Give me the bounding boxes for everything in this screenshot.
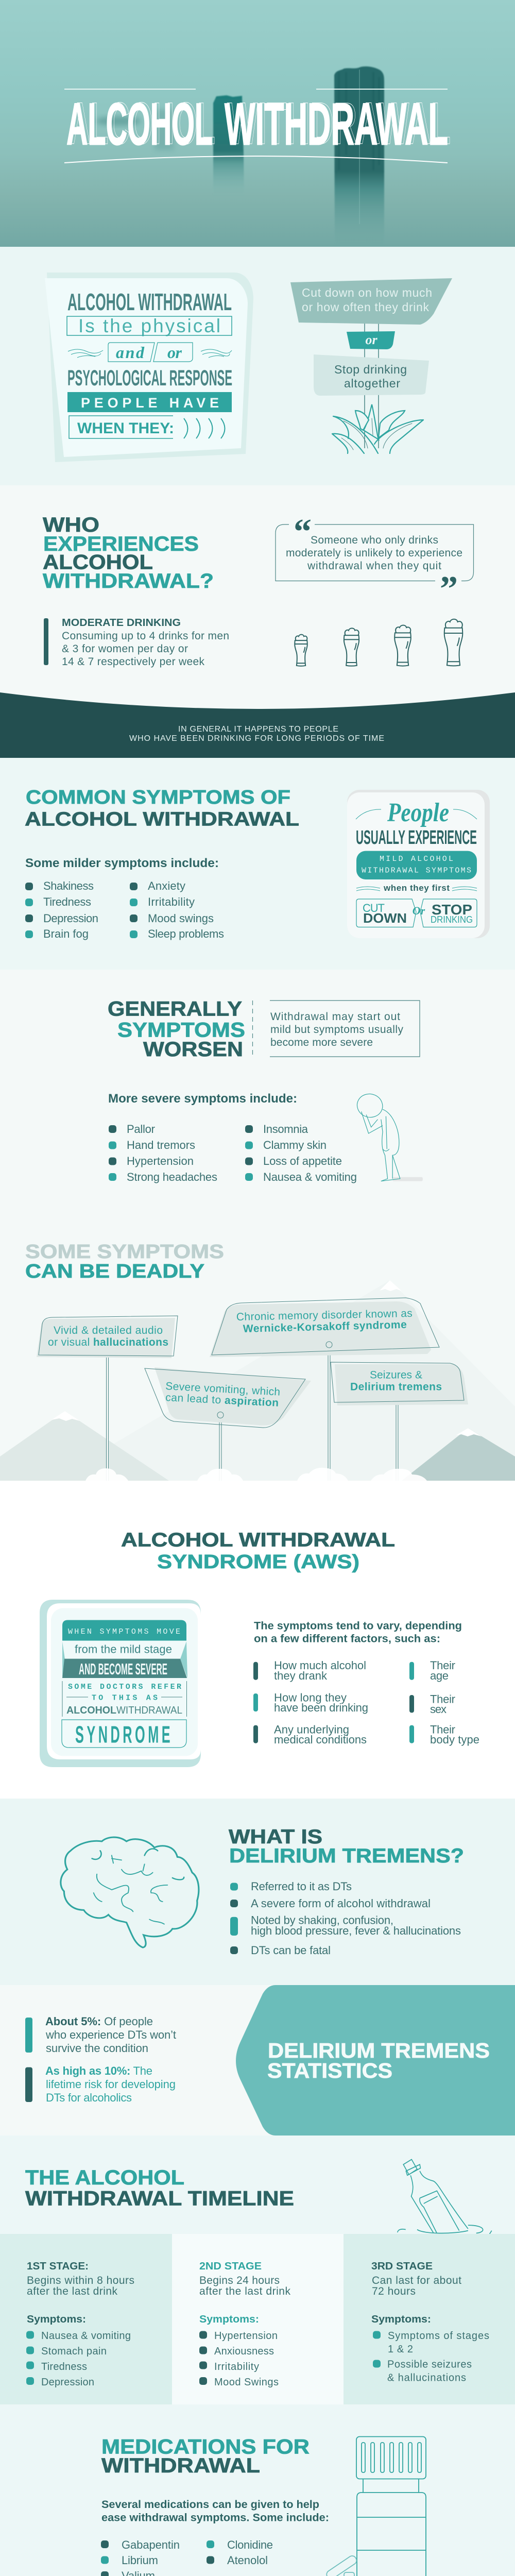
subheading: milder symptoms: Some milder symptoms include: <box>25 856 219 870</box>
panel: people usually experience card: Or <box>413 904 425 917</box>
heading: common symptoms <box>25 787 299 831</box>
quote box <box>276 512 474 609</box>
card header: when symptoms move: WHEN SYMPTOMS MOVE <box>68 1628 180 1636</box>
text: some doctors refer: ALCOHOL <box>66 1705 116 1716</box>
banner: people have: PEOPLE HAVE <box>81 395 219 411</box>
list: varying factors: they drank <box>274 1669 328 1682</box>
list: varying factors: have been drinking <box>274 1701 368 1714</box>
heading: medications <box>101 2436 310 2477</box>
list: statistics: lifetime risk for developing <box>46 2078 176 2091</box>
list: severe symptoms: Loss of appetite <box>263 1155 342 1167</box>
box: syndrome: SYNDROME <box>75 1721 173 1748</box>
icon: pill bottle and pills <box>325 2437 426 2576</box>
quote box: ” <box>440 569 458 609</box>
list: milder symptoms: Sleep problems <box>148 927 224 940</box>
and / or tags: and <box>116 343 145 362</box>
list: severe symptoms: Hand tremors <box>127 1139 195 1151</box>
heading: generally symptoms worsen <box>108 997 252 1061</box>
and / or tags <box>68 343 232 362</box>
heading: what is delirium tremens: WHAT IS <box>229 1826 322 1848</box>
heading: some symptoms can be deadly: CAN BE DEADLY <box>25 1261 204 1282</box>
panel: people usually experience card <box>347 790 490 938</box>
callout: withdrawal may start out mild: become more severe <box>270 1037 373 1048</box>
panel: 2nd stage: Mood Swings <box>214 2377 279 2388</box>
when they with chevrons <box>69 416 225 438</box>
heading: some symptoms can be deadly <box>25 1241 224 1282</box>
list: varying factors: Their <box>430 1659 455 1672</box>
list: delirium tremens facts: A severe form of alcohol withdrawal <box>251 1897 431 1910</box>
panel: 1st stage: Tiredness <box>41 2361 87 2372</box>
moderate drinking definition: Consuming up to 4 drinks for men <box>62 630 229 642</box>
heading: who experiences alcohol withdrawal: ALCOHOL <box>43 551 153 574</box>
banner: people have <box>67 392 232 412</box>
heading: common symptoms: ALCOHOL WITHDRAWAL <box>25 809 299 831</box>
panel: definition card <box>45 273 253 462</box>
list: delirium tremens facts: Noted by shaking, confusion, <box>251 1914 393 1927</box>
panel: 2nd stage: Begins 24 hours <box>199 2275 280 2286</box>
icon: hunched person <box>353 1090 423 1181</box>
list: varying factors: How much alcohol <box>274 1659 366 1672</box>
panel: 1st stage: Symptoms: <box>27 2314 86 2325</box>
list: severe symptoms: Clammy skin <box>263 1139 327 1151</box>
heading: who experiences alcohol withdrawal: WITHDRAWAL? <box>43 570 214 592</box>
panel: 3rd stage: Symptoms: <box>371 2314 431 2325</box>
sign: hallucinations: or visual hallucinations <box>48 1336 168 1348</box>
list: varying factors: Their <box>430 1723 455 1736</box>
heading: what is delirium tremens <box>229 1826 464 1867</box>
list: severe symptoms <box>109 1123 357 1183</box>
heading: who experiences alcohol withdrawal: EXPERIENCES <box>43 533 199 555</box>
panel: people usually experience card: DOWN <box>363 910 407 926</box>
list: statistics: DTs for alcoholics <box>46 2091 132 2104</box>
panel: 2nd stage <box>172 2234 344 2404</box>
list: delirium tremens facts: DTs can be fatal <box>251 1944 331 1957</box>
list: delirium tremens facts: high blood pressure, fever & hallucinations <box>251 1924 461 1937</box>
sign: or <box>347 331 395 349</box>
sign: stop drinking: altogether <box>344 377 400 390</box>
panel: people usually experience card: STOP <box>432 902 472 918</box>
heading: timeline <box>25 2166 294 2210</box>
boxed phrase: is the physical: Is the physical <box>78 315 220 336</box>
heading: generally symptoms worsen: GENERALLY <box>108 997 242 1020</box>
heading: common symptoms: COMMON SYMPTOMS OF <box>26 787 290 808</box>
panel: people usually experience card: MILD ALCOHOL <box>380 855 453 863</box>
sign: cut down <box>290 278 452 325</box>
text: medications intro <box>101 2499 329 2524</box>
banner: in general <box>0 692 515 758</box>
heading: timeline: WITHDRAWAL TIMELINE <box>25 2188 294 2210</box>
list: statistics: survive the condition <box>46 2042 148 2055</box>
quote box: moderately is unlikely to experience <box>286 547 462 559</box>
list: milder symptoms: Shakiness <box>43 879 94 892</box>
sign: wernicke-korsakoff syndrome: Chronic memory disorder known as <box>236 1308 413 1323</box>
panel: people usually experience card: DRINKING <box>431 914 473 925</box>
list: milder symptoms: Mood swings <box>148 912 214 925</box>
list: severe symptoms: Pallor <box>127 1123 155 1136</box>
text: medications intro: Several medications can be given to help <box>101 2499 319 2511</box>
panel: 3rd stage: Possible seizures <box>387 2359 472 2370</box>
icon: brain <box>61 1837 199 1947</box>
panel: people usually experience card: CUT <box>363 902 385 914</box>
panel: people usually experience card: People <box>387 798 449 827</box>
list: varying factors: Any underlying <box>274 1723 349 1736</box>
panel: 3rd stage: & hallucinations <box>387 2372 466 2383</box>
illustration: mountains <box>0 1280 515 1481</box>
heading: alcohol withdrawal syndrome: ALCOHOL WITHDRAWAL <box>121 1529 395 1551</box>
panel: 1st stage: after the last drink <box>27 2285 117 2297</box>
sign: cut down: or how often they drink <box>302 300 430 314</box>
text: factors intro: on a few different factors, such as: <box>254 1633 440 1645</box>
list: medications: Atenolol <box>227 2554 268 2567</box>
title: alcohol withdrawal <box>64 89 451 163</box>
list: varying factors: How long they <box>274 1691 347 1704</box>
panel: 3rd stage: 72 hours <box>372 2285 416 2297</box>
list: varying factors: medical conditions <box>274 1733 367 1746</box>
moderate drinking definition: MODERATE DRINKING <box>62 617 181 629</box>
panel: 1st stage: Stomach pain <box>41 2346 107 2357</box>
panel: 2nd stage: Irritability <box>214 2361 259 2372</box>
heading: alcohol withdrawal syndrome: SYNDROME (AWS) <box>157 1551 359 1573</box>
list: severe symptoms: Insomnia <box>263 1123 308 1136</box>
sign: wernicke-korsakoff syndrome: Wernicke-Korsakoff syndrome <box>243 1319 407 1335</box>
callout: withdrawal may start out mild: mild but symptoms usually <box>270 1024 404 1036</box>
heading: medications: WITHDRAWAL <box>101 2454 260 2477</box>
heading: who experiences alcohol withdrawal: WHO <box>43 514 99 536</box>
panel: 2nd stage: 2ND STAGE <box>199 2261 262 2272</box>
list: medications: Gabapentin <box>122 2538 180 2551</box>
sign: cut down: Cut down on how much <box>302 286 432 299</box>
sign: delirium tremens: Seizures & <box>370 1369 422 1381</box>
quote box: withdrawal when they quit <box>307 560 441 572</box>
moderate drinking definition: & 3 for women per day or <box>62 643 188 655</box>
heading: medications: MEDICATIONS FOR <box>101 2436 310 2459</box>
banner: in general: IN GENERAL IT HAPPENS TO PEOPLE <box>178 725 338 734</box>
folded ribbon: from the mild stage: from the mild stage <box>75 1643 172 1656</box>
panel: 1st stage: Depression <box>41 2377 94 2388</box>
text: some doctors refer: SOME DOCTORS REFER <box>68 1683 181 1691</box>
panel: delirium tremens statistics: DELIRIUM TREMENS <box>268 2039 490 2062</box>
panel: syndrome card <box>40 1600 201 1767</box>
sign: stop drinking: Stop drinking <box>334 363 407 376</box>
list: milder symptoms <box>25 879 224 940</box>
sign: hallucinations: Vivid & detailed audio <box>54 1325 163 1336</box>
list: statistics: As high as 10%: The <box>45 2064 152 2077</box>
moderate drinking definition: 14 & 7 respectively per week <box>62 656 205 668</box>
list: medications <box>101 2538 273 2576</box>
list: varying factors: body type <box>430 1733 479 1746</box>
list: varying factors <box>253 1659 479 1746</box>
panel: 2nd stage: Anxiousness <box>214 2346 274 2357</box>
list: delirium tremens facts: Referred to it as DTs <box>251 1880 352 1893</box>
sign: hallucinations <box>37 1316 178 1481</box>
sign: delirium tremens <box>331 1362 468 1481</box>
callout: withdrawal may start out mild <box>270 1001 420 1057</box>
quote box: Someone who only drinks <box>311 534 438 546</box>
panel: delirium tremens statistics: STATISTICS <box>267 2059 392 2082</box>
card line: psychological response: PSYCHOLOGICAL RESPONSE <box>67 366 232 391</box>
list: milder symptoms: Anxiety <box>148 879 185 892</box>
list: milder symptoms: Brain fog <box>43 927 89 940</box>
sign: aspiration: Severe vomiting, which <box>165 1380 281 1398</box>
text: medications intro: ease withdrawal symptoms. Some include: <box>101 2512 329 2524</box>
heading: what is delirium tremens: DELIRIUM TREMENS? <box>229 1845 464 1867</box>
card header: when symptoms move <box>62 1620 186 1640</box>
text: factors intro: The symptoms tend to vary, depending <box>254 1620 462 1632</box>
title: alcohol withdrawal: ALCOHOL <box>66 92 213 158</box>
panel: 3rd stage: 3RD STAGE <box>371 2261 433 2272</box>
text: some doctors refer <box>62 1681 186 1717</box>
text: some doctors refer: TO THIS AS <box>92 1694 158 1703</box>
panel: 1st stage: Nausea & vomiting <box>41 2330 131 2342</box>
list: milder symptoms: Irritability <box>148 895 195 908</box>
heading: timeline: THE ALCOHOL <box>25 2166 184 2189</box>
moderate drinking definition <box>44 617 229 668</box>
icon: bottle in water <box>398 2159 492 2234</box>
title: alcohol withdrawal: ALCOHOL <box>69 91 215 157</box>
callout: withdrawal may start out mild: Withdrawal may start out <box>270 1011 400 1023</box>
list: statistics: About 5%: Of people <box>45 2015 153 2028</box>
clouds at the base of the signs <box>85 1468 427 1481</box>
list: milder symptoms: Tiredness <box>43 895 91 908</box>
panel: 3rd stage: Symptoms of stages <box>388 2330 489 2342</box>
hero photo: misty water with wooden posts <box>0 0 515 247</box>
panel: 2nd stage: Symptoms: <box>199 2314 259 2325</box>
list: varying factors: age <box>430 1669 449 1682</box>
panel: 2nd stage: Hypertension <box>214 2330 278 2342</box>
list: varying factors: sex <box>430 1703 447 1716</box>
icon: agave plant <box>332 404 423 453</box>
panel: 1st stage: Begins within 8 hours <box>27 2275 134 2286</box>
sign: aspiration <box>145 1367 311 1481</box>
sign: aspiration: can lead to aspiration <box>165 1392 279 1409</box>
quote box: “ <box>294 512 312 552</box>
heading: generally symptoms worsen: WORSEN <box>143 1038 243 1061</box>
heading: alcohol withdrawal syndrome <box>121 1529 395 1573</box>
list: varying factors: Their <box>430 1693 455 1706</box>
panel: 1st stage: 1ST STAGE: <box>27 2261 89 2272</box>
heading: who experiences alcohol withdrawal <box>43 514 214 592</box>
heading: some symptoms can be deadly: SOME SYMPTOMS <box>25 1241 224 1263</box>
panel: 3rd stage <box>344 2234 515 2404</box>
when they with chevrons: WHEN THEY: <box>77 420 174 437</box>
signpost: cut down or stop <box>290 278 452 453</box>
heading: generally symptoms worsen: SYMPTOMS <box>117 1019 245 1042</box>
text: factors intro <box>254 1620 462 1645</box>
panel: people usually experience card: WITHDRAWAL SYMPTOMS <box>362 867 471 875</box>
folded ribbon: from the mild stage: AND BECOME SEVERE <box>79 1660 167 1678</box>
list: severe symptoms: Hypertension <box>127 1155 194 1167</box>
panel: 1st stage <box>0 2234 172 2404</box>
sign: or: or <box>365 332 377 347</box>
banner: in general: WHO HAVE BEEN DRINKING FOR LONG PERIODS OF TIME <box>129 734 384 743</box>
list: severe symptoms: Strong headaches <box>127 1171 217 1183</box>
panel: 2nd stage: after the last drink <box>199 2285 290 2297</box>
panel: delirium tremens statistics <box>236 1985 515 2136</box>
icons: four beer glasses <box>295 619 462 666</box>
panel: 3rd stage: 1 & 2 <box>388 2344 413 2355</box>
list: medications: Clonidine <box>227 2538 273 2551</box>
sign: wernicke-korsakoff syndrome <box>210 1298 439 1481</box>
and / or tags: or <box>167 343 182 362</box>
list: statistics <box>25 2015 176 2104</box>
subheading: severe symptoms: More severe symptoms include: <box>108 1092 297 1106</box>
panel: 3rd stage: Can last for about <box>372 2275 461 2286</box>
text: some doctors refer: WITHDRAWAL <box>116 1705 182 1716</box>
panel: people usually experience card: when they first <box>383 883 450 893</box>
list: medications: Librium <box>122 2554 158 2567</box>
sign: delirium tremens: Delirium tremens <box>350 1381 442 1393</box>
folded ribbon: from the mild stage <box>62 1641 187 1678</box>
list: severe symptoms: Nausea & vomiting <box>263 1171 357 1183</box>
list: statistics: who experience DTs won’t <box>45 2028 176 2041</box>
sign: stop drinking <box>314 354 429 396</box>
list: milder symptoms: Depression <box>43 912 98 925</box>
list: delirium tremens facts <box>230 1880 461 1957</box>
card headline: ALCOHOL WITHDRAWAL <box>67 289 232 315</box>
